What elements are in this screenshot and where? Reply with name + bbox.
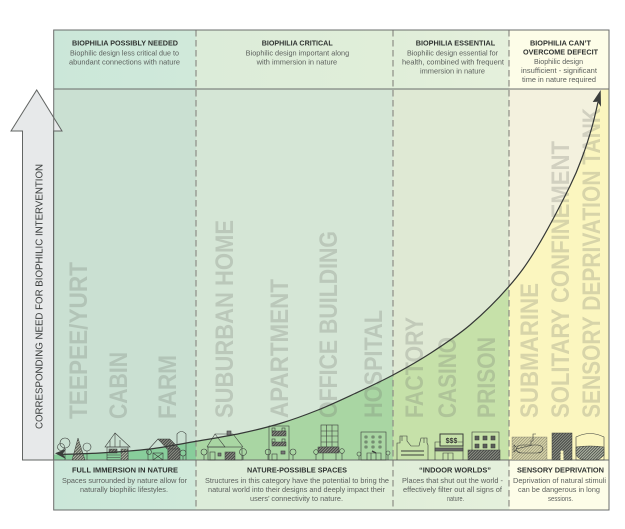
footer: sensory deprivation [513, 466, 606, 503]
panel: footer band [54, 460, 609, 510]
footer: sensory deprivation: can be dangerous in long [518, 485, 600, 494]
header: biophilia can't overcome defecit [521, 38, 598, 84]
header: biophilia critical: BIOPHILIA CRITICAL [262, 38, 333, 47]
column dividers [196, 30, 509, 510]
chart: coloured area under the curve [54, 89, 609, 460]
icon: casino [435, 434, 463, 460]
header: biophilia can't overcome defecit: BIOPHILIA CAN’T [530, 38, 591, 47]
vertical labels: space types: HOSPITAL [360, 310, 388, 418]
header: biophilia can't overcome defecit: Biophilic design [534, 57, 583, 66]
footer: sensory deprivation: Deprivation of natural stimuli [513, 476, 606, 485]
icon: office building [314, 425, 344, 460]
vertical labels: space types: PRISON [473, 337, 501, 418]
vertical labels: space types: SUBMARINE [516, 283, 544, 418]
panel: header band [54, 30, 609, 89]
footer: indoor worlds: “INDOOR WORLDS” [419, 466, 491, 475]
icon: prison [468, 432, 500, 460]
footer: nature-possible spaces: users’ connectivity to nature. [250, 494, 343, 503]
left arrow: need for biophilic intervention [11, 90, 62, 460]
footer: indoor worlds: nature. [447, 494, 464, 503]
vertical labels: space types: CABIN [105, 352, 133, 419]
footer: indoor worlds: Places that shut out the world - [402, 476, 504, 485]
vertical labels: space types: APARTMENT [266, 279, 294, 418]
header: biophilia can't overcome defecit: time in nature required [522, 75, 596, 84]
footer: nature-possible spaces: natural world into their designs and deeply impact their [208, 485, 386, 494]
icon: factory [397, 436, 428, 460]
vertical labels: space types: FARM [154, 355, 182, 419]
vertical labels: space types: OFFICE BUILDING [315, 231, 343, 418]
footer: indoor worlds: effectively filter out all signs of [403, 485, 502, 494]
vertical labels: space types: SOLITARY CONFINEMENT [547, 141, 575, 418]
icon: casino: $$$ [446, 438, 457, 445]
header: biophilia essential: health, combined with frequent [402, 58, 504, 67]
header: biophilia can't overcome defecit: insufficient - significant [521, 66, 597, 75]
icon: solitary confinement cell [552, 433, 572, 460]
header: biophilia can't overcome defecit: OVERCOME DEFECIT [523, 48, 598, 56]
left arrow: need for biophilic intervention: CORRESPONDING NEED FOR BIOPHILIC INTERVENTION [34, 164, 46, 429]
header: biophilia possibly needed: abundant connections with nature [69, 58, 180, 67]
header: biophilia possibly needed: Biophilic design less critical due to [70, 48, 179, 58]
header: biophilia essential: immersion in nature [420, 66, 485, 76]
footer: sensory deprivation: sessions. [548, 494, 573, 503]
curve: need for intervention [55, 90, 601, 459]
icon: hospital [357, 432, 390, 460]
footer: nature-possible spaces: NATURE-POSSIBLE SPACES [247, 466, 347, 475]
vertical labels: space types [65, 108, 606, 419]
icon: sensory deprivation tank [576, 434, 604, 460]
header: biophilia essential: BIOPHILIA ESSENTIAL [416, 38, 496, 47]
icon: farm and silo [146, 432, 186, 460]
footer: indoor worlds [402, 466, 504, 503]
vertical labels: space types: TEEPEE/YURT [65, 262, 93, 419]
header: biophilia essential [402, 38, 504, 76]
footer: full immersion in nature: Spaces surrounded by nature allow for [62, 476, 188, 485]
vertical labels: space types: FACTORY [401, 317, 429, 418]
icon: cabin [105, 433, 130, 460]
footer: full immersion in nature [62, 466, 188, 494]
chart: background columns above the curve [54, 89, 609, 460]
icon: teepee and trees [58, 438, 91, 460]
vertical labels: space types: SENSORY DEPRIVATION TANK [578, 108, 606, 418]
icon: apartment [265, 426, 296, 460]
footer: full immersion in nature: FULL IMMERSION IN NATURE [72, 466, 178, 475]
header: biophilia critical: Biophilic design important along [246, 48, 349, 58]
footer: nature-possible spaces [205, 466, 389, 503]
header: biophilia essential: Biophilic design essential for [407, 48, 499, 58]
footer: nature-possible spaces: Structures in this category have the potential to bring the [205, 476, 389, 485]
footer: full immersion in nature: naturally biophilic lifestyles. [80, 485, 168, 494]
header: biophilia possibly needed: BIOPHILIA POSSIBLY NEEDED [72, 38, 179, 47]
icon: suburban home [201, 431, 246, 460]
header: biophilia critical [246, 38, 349, 67]
vertical labels: space types: SUBURBAN HOME [211, 220, 239, 418]
header: biophilia critical: with immersion in nature [256, 58, 337, 67]
icon: submarine [512, 434, 547, 460]
footer: sensory deprivation: SENSORY DEPRIVATION [517, 466, 604, 475]
header: biophilia possibly needed [69, 38, 180, 67]
vertical labels: space types: CASINO [434, 337, 462, 418]
